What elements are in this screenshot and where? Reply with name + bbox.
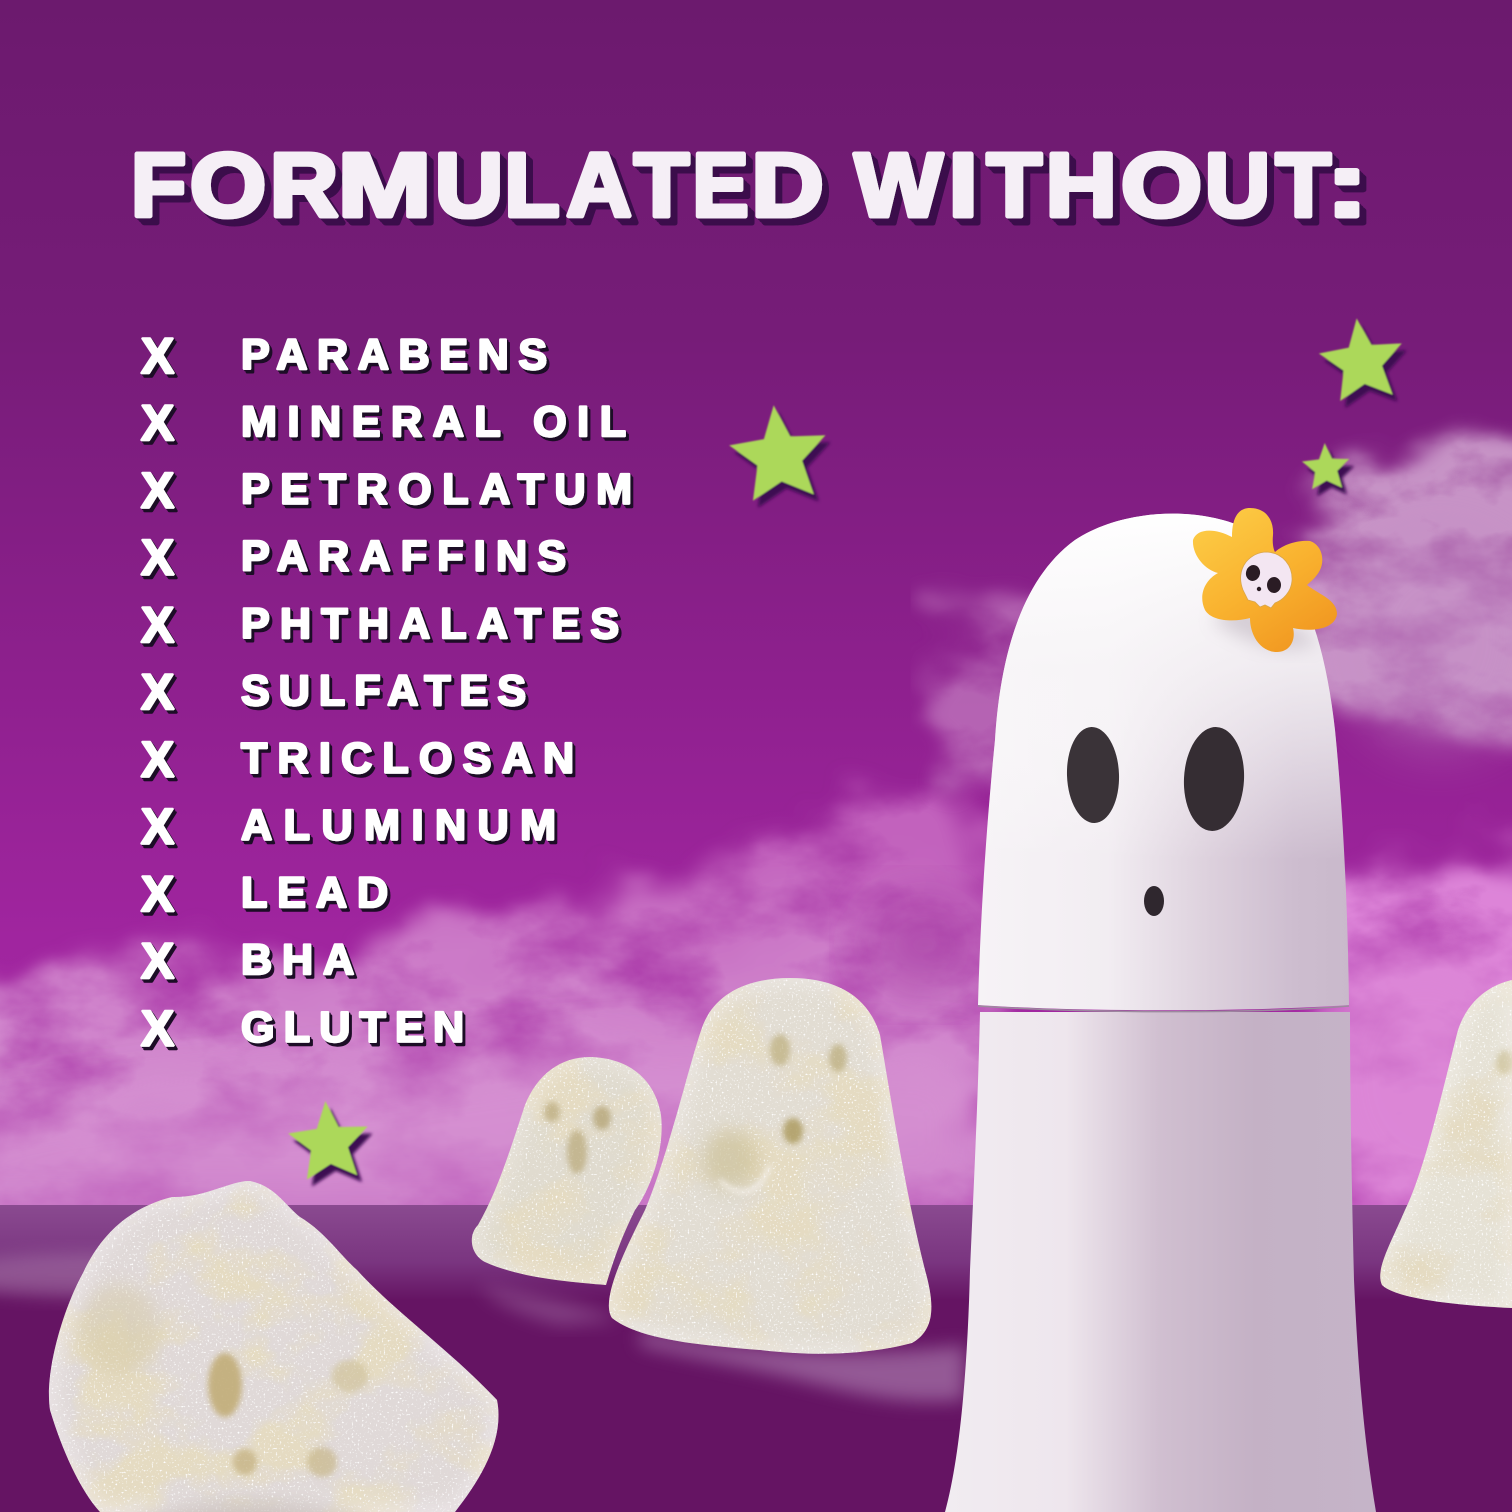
row: sulfates bbox=[141, 664, 526, 720]
row: phthalates bbox=[141, 597, 619, 653]
row: mineral oil: MINERAL OIL bbox=[241, 398, 626, 446]
title: L bbox=[504, 136, 560, 236]
petals bbox=[1193, 508, 1337, 652]
row: gluten bbox=[141, 1000, 464, 1056]
flower shadow bbox=[1212, 600, 1320, 648]
row: parabens bbox=[141, 328, 547, 384]
row: mineral oil: X bbox=[141, 395, 174, 451]
row: triclosan: X bbox=[141, 732, 174, 788]
row: petrolatum: X bbox=[141, 462, 174, 518]
bottle body bbox=[945, 1012, 1376, 1512]
row: triclosan bbox=[141, 732, 574, 788]
large mochi ghost bbox=[40, 1175, 510, 1512]
medium mochi ghost bbox=[600, 975, 940, 1360]
row: aluminum: ALUMINUM bbox=[241, 802, 556, 850]
title: M bbox=[338, 136, 431, 236]
row: parabens: PARABENS bbox=[241, 331, 547, 379]
right eye bbox=[1181, 726, 1247, 832]
title: A bbox=[566, 136, 632, 236]
title: T bbox=[1276, 136, 1331, 236]
row: parabens: X bbox=[141, 328, 174, 384]
ingredient list bbox=[141, 328, 632, 1056]
title: U bbox=[1205, 136, 1270, 236]
right mochi ghost bbox=[1375, 975, 1512, 1315]
title bbox=[131, 136, 1368, 236]
ghost bottle bbox=[945, 514, 1376, 1512]
row: paraffins: PARAFFINS bbox=[241, 532, 566, 580]
skull bbox=[1241, 552, 1292, 608]
title: I bbox=[949, 136, 978, 236]
row: paraffins bbox=[141, 530, 566, 586]
row: aluminum: X bbox=[141, 798, 174, 854]
cap highlight bbox=[978, 514, 1349, 1010]
title: : bbox=[1326, 136, 1368, 236]
flower with skull bbox=[1193, 508, 1337, 652]
title: T bbox=[634, 136, 689, 236]
seam bbox=[978, 1006, 1349, 1012]
row: mineral oil bbox=[141, 395, 626, 451]
row: phthalates: PHTHALATES bbox=[241, 600, 619, 648]
star: top right bbox=[1315, 313, 1408, 403]
row: bha: X bbox=[141, 933, 174, 989]
title: F bbox=[131, 136, 186, 236]
row: lead bbox=[141, 866, 388, 922]
title: R bbox=[270, 136, 338, 236]
row: sulfates: X bbox=[141, 664, 174, 720]
star: small right bbox=[1301, 442, 1351, 490]
row: phthalates: X bbox=[141, 597, 174, 653]
title: O bbox=[1121, 136, 1202, 236]
table floor bbox=[0, 1205, 1512, 1512]
title: U bbox=[435, 136, 503, 236]
bottle cap bbox=[978, 514, 1349, 1010]
row: gluten: X bbox=[141, 1000, 174, 1056]
title: E bbox=[692, 136, 748, 236]
title: O bbox=[190, 136, 266, 236]
row: bha bbox=[141, 933, 354, 989]
small mochi ghost bbox=[472, 1057, 662, 1285]
row: petrolatum bbox=[141, 462, 632, 518]
row: petrolatum: PETROLATUM bbox=[241, 466, 632, 514]
row: lead: LEAD bbox=[241, 869, 388, 917]
row: sulfates: SULFATES bbox=[241, 667, 526, 715]
row: gluten: GLUTEN bbox=[241, 1004, 464, 1052]
row: bha: BHA bbox=[241, 936, 354, 984]
nose bbox=[1144, 886, 1164, 916]
title: H bbox=[1046, 136, 1117, 236]
row: aluminum bbox=[141, 798, 556, 854]
title: D bbox=[752, 136, 824, 236]
title: T bbox=[987, 136, 1042, 236]
clouds bbox=[0, 420, 1512, 1300]
row: lead: X bbox=[141, 866, 174, 922]
title: W bbox=[854, 136, 943, 236]
left eye bbox=[1065, 726, 1121, 824]
star: lower left bbox=[286, 1098, 372, 1181]
star: centre bbox=[725, 400, 832, 503]
row: triclosan: TRICLOSAN bbox=[241, 734, 574, 782]
row: paraffins: X bbox=[141, 530, 174, 586]
